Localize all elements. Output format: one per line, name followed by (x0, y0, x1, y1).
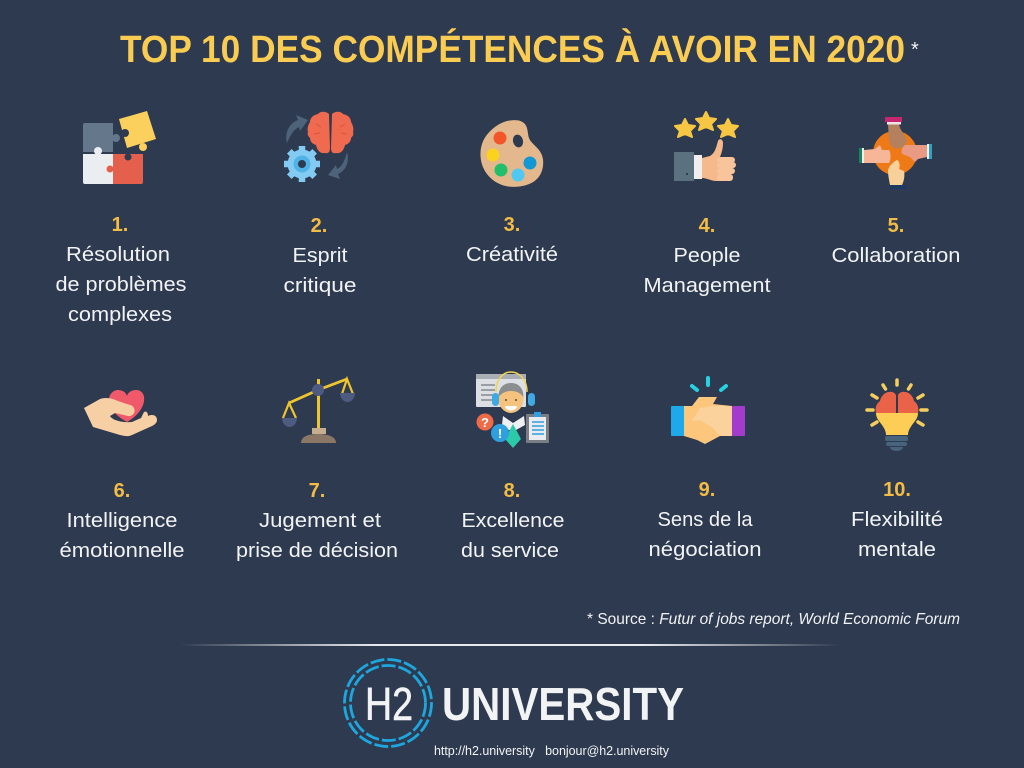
skill 10 label: mentale (858, 538, 936, 561)
skill 5 label: 5. (888, 215, 904, 237)
skill 9 label: négociation (648, 538, 762, 561)
skill 2 label (284, 215, 356, 297)
icon: brain light bulb (867, 380, 927, 451)
icon: customer service agent (476, 372, 549, 448)
icon: thumbs up and stars (674, 112, 738, 181)
skill 6 label: Intelligence (66, 509, 178, 532)
logo: H2 University (344, 660, 684, 746)
skill 9 label (648, 479, 762, 561)
skill 3 label: 3. (504, 214, 520, 236)
skill 10 label (851, 479, 943, 561)
skill 7 label: 7. (309, 480, 325, 502)
skill 7 label: Jugement et (259, 509, 381, 532)
source note: * Source : Futur of jobs report, World Economic Forum (587, 611, 960, 628)
skill 1 label: 1. (112, 214, 128, 236)
skill 10 label: Flexibilité (851, 508, 943, 531)
icon: heart in hand (84, 390, 157, 436)
title: TOP 10 DES COMPÉTENCES À AVOIR EN 2020 (120, 27, 905, 71)
icon: customer service agent: ? (481, 415, 489, 430)
skill 6 label: émotionnelle (60, 539, 184, 562)
skill 8 label: 8. (504, 480, 520, 502)
skill 4 label: Management (644, 274, 771, 297)
skill 7 label: prise de décision (236, 539, 398, 562)
skill 1 label (56, 214, 186, 326)
skill 1 label: de problèmes (56, 273, 186, 296)
skill 3 label: Créativité (466, 243, 558, 266)
icon: scales of justice (282, 379, 355, 443)
title: * (911, 39, 919, 61)
skill 8 label: Excellence (462, 509, 564, 532)
icon: puzzle (83, 111, 156, 184)
skill 4 label: 4. (699, 215, 715, 237)
skill 10 label: 10. (883, 479, 911, 501)
skill 2 label: critique (284, 274, 356, 297)
skill 3 label (466, 214, 558, 266)
skill 4 label (644, 215, 771, 297)
contact links: http://h2.university bonjour@h2.university (434, 744, 670, 758)
icon: brain and gear (284, 112, 353, 182)
logo: H2 University: UNIVERSITY (442, 678, 684, 730)
icon: customer service agent: ! (498, 426, 502, 441)
skill 8 label (461, 480, 564, 562)
skill 6 label: 6. (114, 480, 130, 502)
skill 7 label (236, 480, 398, 562)
skill 2 label: Esprit (292, 244, 348, 267)
skill 2 label: 2. (311, 215, 327, 237)
logo: H2 University: H2 (365, 678, 413, 730)
skill 8 label: du service (461, 539, 559, 562)
skill 4 label: People (674, 244, 740, 267)
skill 5 label (832, 215, 960, 267)
skill 1 label: Résolution (66, 243, 170, 266)
skill 6 label (60, 480, 184, 562)
skill 9 label: Sens de la (658, 508, 753, 531)
icon: collaboration hands (859, 117, 932, 189)
skill 1 label: complexes (68, 303, 172, 326)
icon: handshake (671, 378, 745, 444)
skill 5 label: Collaboration (832, 244, 960, 267)
skill 9 label: 9. (699, 479, 715, 501)
icon: palette (480, 120, 543, 187)
